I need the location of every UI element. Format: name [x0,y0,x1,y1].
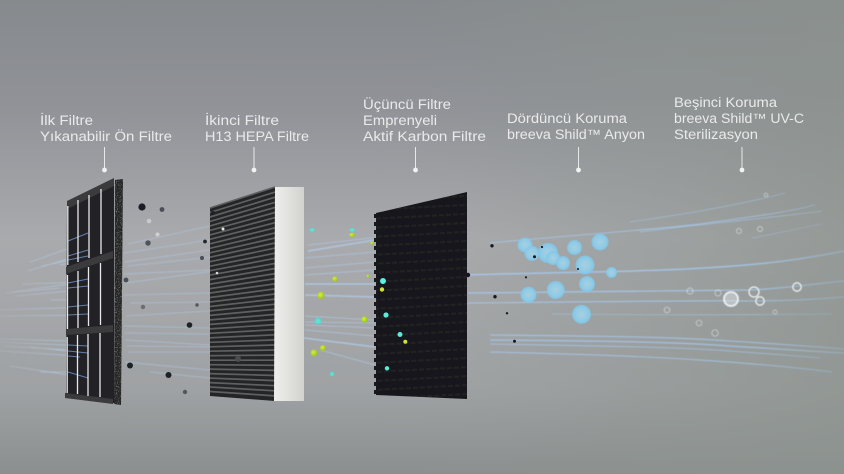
label: first filter: Yıkanabilir Ön Filtre [40,129,172,144]
label: first filter: İlk Filtre [40,113,93,128]
filter 3 captured particles [380,278,407,370]
anion ions: blue bubbles [518,234,617,324]
leader: second filter [252,147,256,172]
filter 2 trapped particles [211,211,241,362]
air streams: right side curved flow [468,193,844,372]
air streams: between first and second filter [124,226,222,378]
filter 1 foam side [114,179,123,405]
air streams: between second and third filter [304,238,375,365]
label: fourth protection [507,111,645,142]
filter 3: activated carbon [376,192,467,399]
label: fifth protection: Sterilizasyon [674,127,758,142]
leader: fourth protection [576,147,581,172]
leader: third filter [413,147,418,172]
filter 2 white side [274,187,304,401]
filter 2 pleated face [210,187,275,401]
filter 1 dark face [66,180,114,403]
label: fourth protection: breeva Shild™ Anyon [507,127,645,142]
pollutant particles: green and teal [309,228,374,376]
filter 1: washable pre-filter [65,178,123,405]
label: second filter: İkinci Filtre [205,113,279,128]
leader: fifth protection [740,147,744,172]
label: second filter: H13 HEPA Filtre [205,129,309,144]
air streams: left of first filter [0,241,90,378]
filter 2: H13 HEPA [210,187,304,401]
label: fifth protection: Beşinci Koruma [674,95,778,110]
label: third filter: Üçüncü Filtre [363,97,451,112]
dust particles: between first and second filter [124,203,207,394]
UV-C water droplets [664,193,801,336]
label: third filter: Emprenyeli [363,113,437,128]
label: fifth protection [674,95,804,142]
filter 1 white ribs [67,189,101,397]
leader: first filter [102,147,107,172]
dust particles: after third filter [466,244,527,343]
filter 1 air lines through cells [68,233,88,378]
label: third filter [363,97,486,144]
label: first filter [40,113,172,144]
label: third filter: Aktif Karbon Filtre [363,129,486,144]
label: fourth protection: Dördüncü Koruma [507,111,628,126]
filter 1 frame bars [65,178,114,404]
filter 3 carbon face [376,192,467,399]
label: fifth protection: breeva Shild™ UV-C [674,111,804,126]
label: second filter [205,113,309,144]
filter 3 serrated edge [374,214,378,395]
